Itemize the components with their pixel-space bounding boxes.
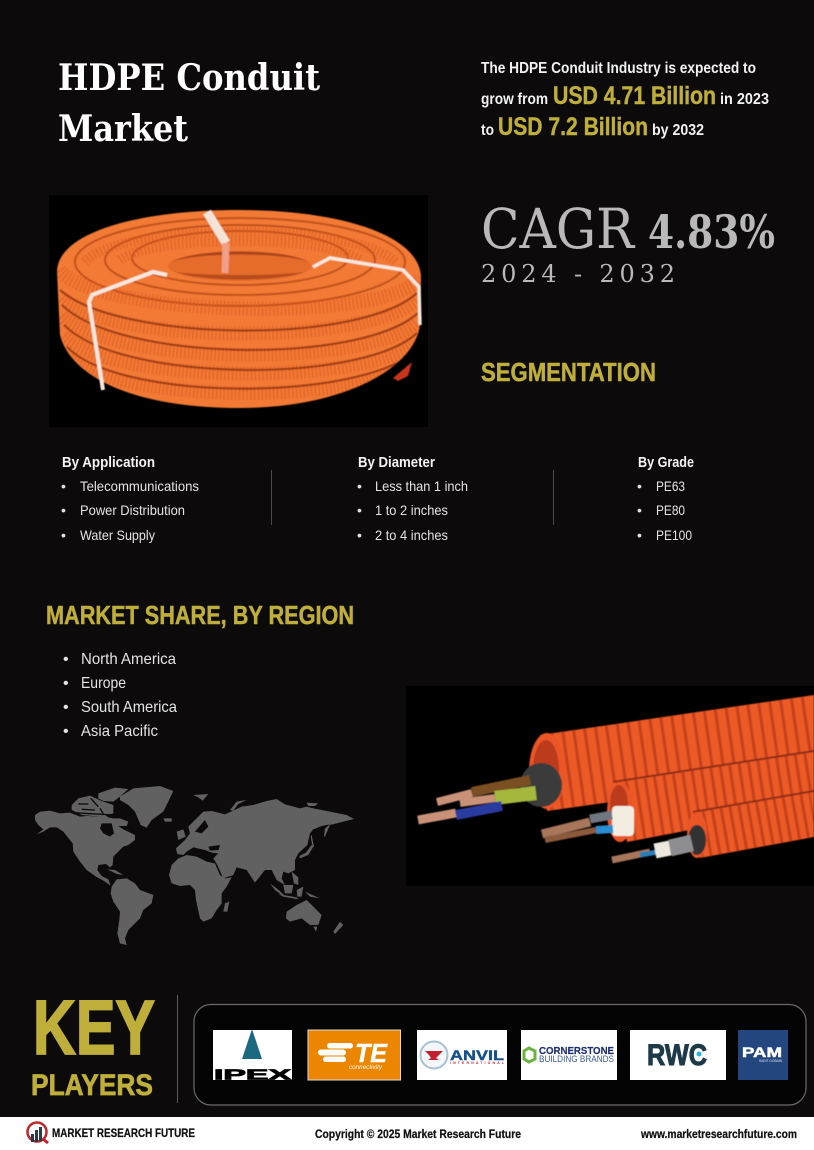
segment: by grade: • [637,527,642,543]
segment: by application [61,454,199,543]
region list: Europe [81,675,126,692]
footer logo [28,1122,195,1143]
segment: by grade: PE100 [656,527,692,543]
segment: by diameter: 1 to 2 inches [375,502,448,518]
logo: TE Connectivity [308,1030,400,1080]
key players panel [194,1004,806,1105]
segment: by grade: • [637,478,642,494]
logo: IPEX [213,1029,292,1084]
logo: Cornerstone Building Brands [521,1030,617,1080]
logo: RWC: RWC [647,1039,707,1072]
region list: North America [81,651,176,668]
segment: by grade: • [637,502,642,518]
logo: Anvil International: INTERNATIONAL [450,1061,505,1065]
title: Market [58,108,188,150]
tube 1 [520,695,814,811]
market forecast text [481,60,769,141]
CAGR: 2024 - 2032 [481,260,675,288]
copyright: Copyright © 2025 Market Research Future [315,1127,521,1141]
logo: PAM [738,1030,788,1080]
tube 3 [612,791,814,860]
market share heading: MARKET SHARE, BY REGION [46,600,354,630]
segment: by grade: PE63 [656,478,685,494]
market forecast text: in 2023 [720,91,769,108]
logo: TE Connectivity: connectivity [349,1064,383,1071]
logo: Cornerstone Building Brands: BUILDING BRANDS [539,1054,614,1064]
logo: TE Connectivity: TE [355,1038,388,1068]
CAGR [481,197,775,288]
market forecast text: to [481,122,494,139]
segment: by diameter [357,454,468,543]
region list: • [63,651,69,668]
segment: by diameter: • [357,527,362,543]
world map [35,786,354,945]
region list: • [63,723,69,740]
CAGR: CAGR [481,197,635,261]
CAGR: 4.83% [648,205,775,259]
region list: South America [81,699,177,716]
segment: by grade [637,454,694,543]
market forecast text: grow from [481,91,548,108]
image: cables in orange conduit [406,686,814,886]
footer [0,1117,814,1150]
segmentation heading: SEGMENTATION [481,357,656,387]
segment: by application: • [61,527,66,543]
segment: by application: Water Supply [80,527,155,543]
segment: by diameter: • [357,478,362,494]
cable wires 2 [542,815,613,840]
key players heading: PLAYERS [31,1069,153,1102]
footer logo: MARKET RESEARCH FUTURE [52,1126,195,1140]
logo: PAM: SAINT-GOBAIN [759,1059,782,1063]
cable wires 1 [418,780,536,820]
segment: by application: Telecommunications [80,478,199,494]
key players heading [31,985,155,1102]
logo: IPEX: IPEX [214,1066,291,1084]
market forecast text: USD 4.71 Billion [553,82,716,110]
segment: by diameter: Less than 1 inch [375,478,468,494]
segment: by grade: PE80 [656,502,685,518]
region list [63,651,177,740]
segment: by diameter: By Diameter [358,454,435,471]
logo: Anvil International: ANVIL [450,1047,505,1063]
logo: Cornerstone Building Brands: CORNERSTONE [539,1046,614,1057]
title [58,57,320,150]
region list: Asia Pacific [81,723,158,740]
image: orange coiled conduit [49,195,428,427]
logo: Anvil International [417,1030,507,1080]
segment: by diameter: 2 to 4 inches [375,527,448,543]
segment: by application: Power Distribution [80,502,185,518]
market forecast text: USD 7.2 Billion [498,113,648,141]
market forecast text: by 2032 [652,122,704,139]
tube 2 [607,751,814,842]
region list: • [63,675,69,692]
segment: by diameter: • [357,502,362,518]
region list: • [63,699,69,716]
logo: RWC [630,1030,726,1080]
key players heading: KEY [33,985,155,1071]
title: HDPE Conduit [58,57,320,99]
segment: by grade: By Grade [638,454,694,471]
market forecast text: The HDPE Conduit Industry is expected to [481,60,756,77]
segment: by application: • [61,478,66,494]
segment: by application: • [61,502,66,518]
segment: by application: By Application [62,454,155,471]
logo: PAM: PAM [742,1044,782,1060]
